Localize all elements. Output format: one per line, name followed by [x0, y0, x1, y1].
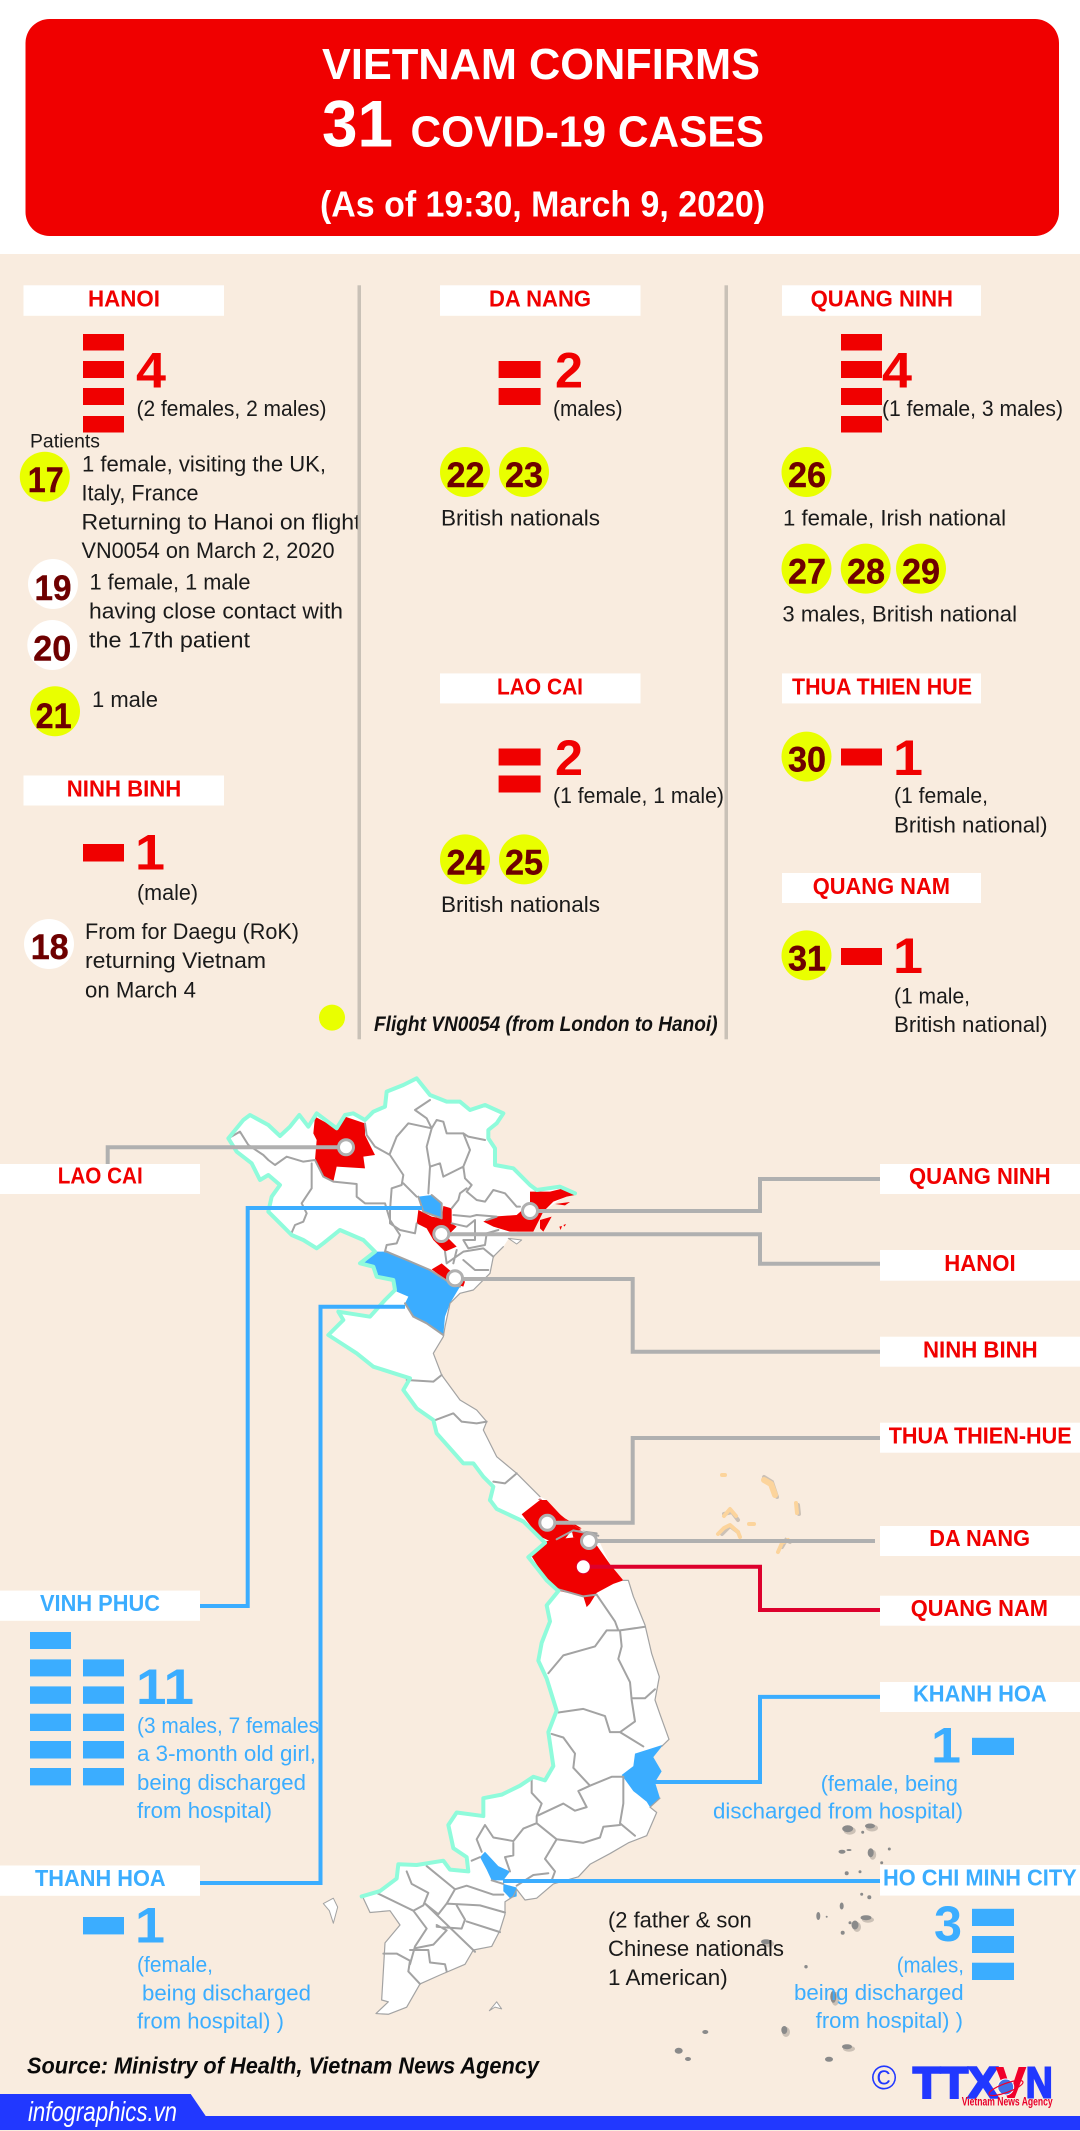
panel: Hanoi: Returning to Hanoi on flight [82, 509, 360, 534]
column dividers [358, 285, 728, 1039]
panel: Lao Cai: British nationals [441, 892, 600, 917]
panel: Thanh Hoa: 1 [135, 1897, 165, 1953]
panel: Lao Cai: LAO CAI [497, 673, 583, 699]
note: HCMC patients [608, 1908, 784, 1990]
logo: TTXVN: N [1026, 2058, 1053, 2107]
panel: Hanoi: 1 female, 1 male [90, 570, 250, 595]
title banner: 31 [322, 87, 393, 161]
panel: Quang Nam: British national) [894, 1012, 1048, 1037]
panel: Vinh Phuc: being discharged [137, 1770, 306, 1795]
map label: Quang Ninh [880, 1163, 1080, 1194]
panel: Ho Chi Minh City [794, 1864, 1080, 2033]
panel: Thanh Hoa: being discharged [142, 1981, 311, 2006]
panel: Lao Cai: (1 female, 1 male) [553, 783, 724, 808]
panel: Hanoi: 20 [33, 630, 71, 669]
panel: Hanoi: the 17th patient [89, 628, 250, 653]
map label: Hanoi: HANOI [944, 1250, 1016, 1276]
title banner: VIETNAM CONFIRMS [322, 40, 760, 89]
map label: Quang Ninh: QUANG NINH [909, 1163, 1051, 1189]
panel: Quang Ninh: 28 [847, 553, 885, 592]
title banner: (As of 19:30, March 9, 2020) [320, 183, 765, 224]
panel: Da Nang: British nationals [441, 505, 600, 530]
panel: Khanh Hoa [713, 1681, 1080, 1823]
panel: Ninh Binh: From for Daegu (RoK) [85, 919, 299, 944]
panel: Quang Ninh [782, 285, 1063, 626]
panel: Da Nang [440, 285, 640, 530]
panel: Hanoi: HANOI [88, 285, 160, 311]
panel: Vinh Phuc: (3 males, 7 females [137, 1713, 319, 1738]
source: Source: Ministry of Health, Vietnam News Agency [27, 2052, 540, 2078]
connector lines [108, 1147, 880, 1883]
islands: Truong Sa archipelago [675, 1824, 891, 2062]
map pins [338, 1140, 596, 1574]
panel: Da Nang: 2 [555, 342, 583, 398]
panel: Vinh Phuc [0, 1590, 319, 1823]
map label: Lao Cai: LAO CAI [58, 1162, 143, 1188]
map label: Quang Nam: QUANG NAM [911, 1595, 1048, 1621]
logo: TTXVN: © [871, 2059, 897, 2097]
panel: Vinh Phuc: VINH PHUC [40, 1590, 160, 1616]
title banner: COVID-19 CASES [410, 108, 764, 157]
logo: TTXVN: V [996, 2058, 1027, 2107]
footer bar: infographics.vn [28, 2096, 177, 2127]
panel: Quang Ninh: (1 female, 3 males) [882, 396, 1063, 421]
panel: Hanoi: 1 male [92, 687, 158, 712]
panel: Hanoi: VN0054 on March 2, 2020 [82, 538, 334, 563]
panel: Khanh Hoa: KHANH HOA [913, 1681, 1047, 1707]
panel: Quang Ninh: 4 [882, 342, 912, 398]
map label: Ninh Binh: NINH BINH [923, 1336, 1038, 1362]
panel: Thanh Hoa: from hospital) ) [137, 2009, 284, 2034]
panel: Quang Ninh: 3 males, British national [782, 601, 1017, 626]
map of Vietnam [228, 1078, 669, 2014]
map label: Quang Nam [880, 1595, 1080, 1626]
panel: Thua Thien Hue: (1 female, [894, 783, 988, 808]
panel: Thua Thien Hue: 1 [893, 730, 923, 786]
panel: Hanoi: 4 [136, 342, 166, 398]
logo: TTXVN [871, 2058, 1053, 2108]
panel: Thanh Hoa: (female, [137, 1952, 213, 1977]
panel: Quang Nam: 1 [893, 928, 923, 984]
panel: Thua Thien Hue: THUA THIEN HUE [792, 673, 972, 699]
note: HCMC patients: 1 American) [608, 1965, 728, 1990]
panel: Da Nang: (males) [553, 396, 623, 421]
panel: Hanoi: 1 female, visiting the UK, [82, 451, 326, 476]
panel: Lao Cai: 24 [446, 843, 485, 882]
legend: flight VN0054: Flight VN0054 (from London to Hanoi) [374, 1013, 718, 1036]
panel: Ho Chi Minh City: (males, [897, 1952, 964, 1978]
panel: Khanh Hoa: (female, being [821, 1771, 958, 1796]
panel: Hanoi: having close contact with [89, 599, 343, 624]
panel: Quang Nam: 31 [788, 939, 826, 978]
islands: Hoang Sa archipelago [718, 1475, 799, 1552]
panel: Quang Nam: QUANG NAM [813, 873, 950, 899]
panel: Quang Ninh: QUANG NINH [811, 285, 953, 311]
map label: Da Nang: DA NANG [929, 1525, 1030, 1551]
legend: flight VN0054 [319, 1005, 718, 1036]
panel: Ho Chi Minh City: 3 [934, 1896, 962, 1952]
panel: Hanoi: 17 [28, 461, 64, 500]
panel: Lao Cai: 2 [555, 730, 583, 786]
panel: Quang Ninh: 29 [902, 553, 940, 592]
panel: Khanh Hoa: 1 [931, 1718, 961, 1774]
panel: Thua Thien Hue: British national) [894, 812, 1048, 837]
panel: Quang Nam: (1 male, [894, 983, 970, 1008]
note: HCMC patients: Chinese nationals [608, 1936, 784, 1961]
panel: Khanh Hoa: discharged from hospital) [713, 1798, 963, 1823]
map label: Da Nang [880, 1525, 1080, 1556]
panel: Thanh Hoa [0, 1865, 311, 2034]
panel: Da Nang: 23 [505, 456, 543, 495]
panel: Hanoi [20, 285, 361, 736]
panel: Hanoi: Patients [30, 432, 100, 453]
panel: Vinh Phuc: 11 [136, 1659, 194, 1715]
panel: Vinh Phuc: a 3-month old girl, [137, 1741, 316, 1766]
panel: Da Nang: 22 [446, 456, 484, 495]
panel: Quang Ninh: 1 female, Irish national [783, 505, 1006, 530]
panel: Hanoi: 19 [34, 569, 72, 608]
panel: Ninh Binh: on March 4 [85, 977, 196, 1002]
panel: Quang Ninh: 26 [788, 456, 826, 495]
panel: Ninh Binh: returning Vietnam [85, 948, 266, 973]
logo: TTXVN: TTX [913, 2058, 998, 2107]
panel: Thua Thien Hue [782, 673, 1048, 837]
title banner [26, 19, 1059, 236]
panel: Hanoi: Italy, France [82, 480, 198, 505]
panel: Ninh Binh: NINH BINH [67, 776, 181, 802]
note: HCMC patients: (2 father & son [608, 1908, 752, 1932]
panel: Ho Chi Minh City: from hospital) ) [816, 2008, 963, 2033]
panel: Da Nang: DA NANG [489, 285, 591, 311]
panel: Lao Cai [440, 673, 724, 917]
map label: Ninh Binh [880, 1336, 1080, 1367]
panel: Ninh Binh [24, 776, 299, 1002]
panel: Thua Thien Hue: 30 [788, 741, 826, 780]
panel: Ho Chi Minh City: being discharged [794, 1980, 964, 2005]
panel: Hanoi: 21 [36, 697, 72, 736]
panel: Ninh Binh: 1 [135, 824, 165, 880]
footer bar [0, 2094, 1080, 2130]
panel: Ninh Binh: (male) [137, 880, 198, 905]
panel: Ninh Binh: 18 [31, 928, 69, 967]
panel: Quang Ninh: 27 [788, 553, 826, 592]
panel: Quang Nam [782, 873, 1048, 1037]
panel: Hanoi: (2 females, 2 males) [136, 396, 326, 421]
panel: Vinh Phuc: from hospital) [137, 1798, 272, 1823]
panel: Thanh Hoa: THANH HOA [35, 1865, 166, 1891]
map label: Hanoi [880, 1250, 1080, 1281]
map label: Lao Cai [0, 1162, 200, 1194]
panel: Lao Cai: 25 [505, 843, 543, 882]
